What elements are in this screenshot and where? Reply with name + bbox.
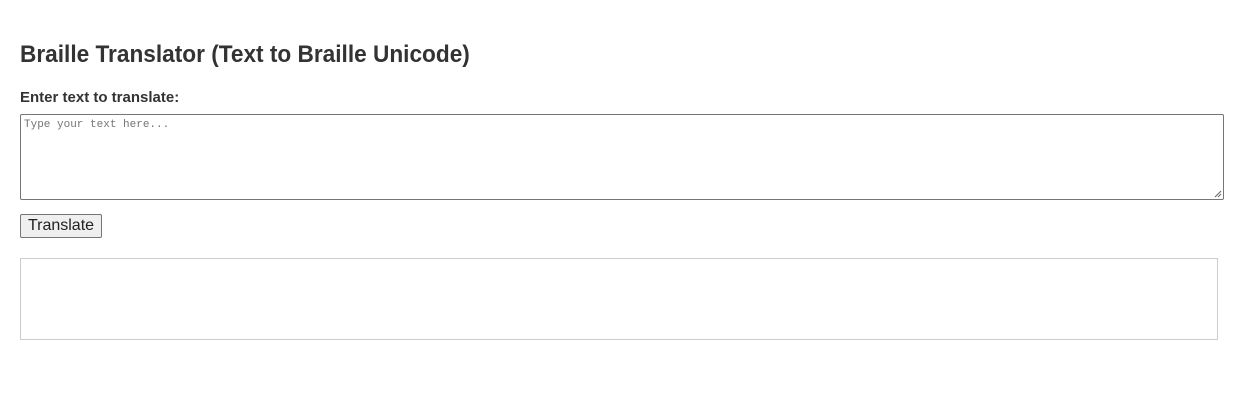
- translate button: Translate: [28, 217, 94, 234]
- translate button: [20, 214, 102, 238]
- title: Braille Translator (Text to Braille Unicode): [20, 41, 470, 68]
- output box: [20, 258, 1218, 340]
- icon: resize handle: [1214, 190, 1222, 198]
- label: input: Enter text to translate:: [20, 89, 179, 106]
- placeholder text: Type your text here...: [24, 119, 169, 131]
- text input area: [20, 114, 1224, 200]
